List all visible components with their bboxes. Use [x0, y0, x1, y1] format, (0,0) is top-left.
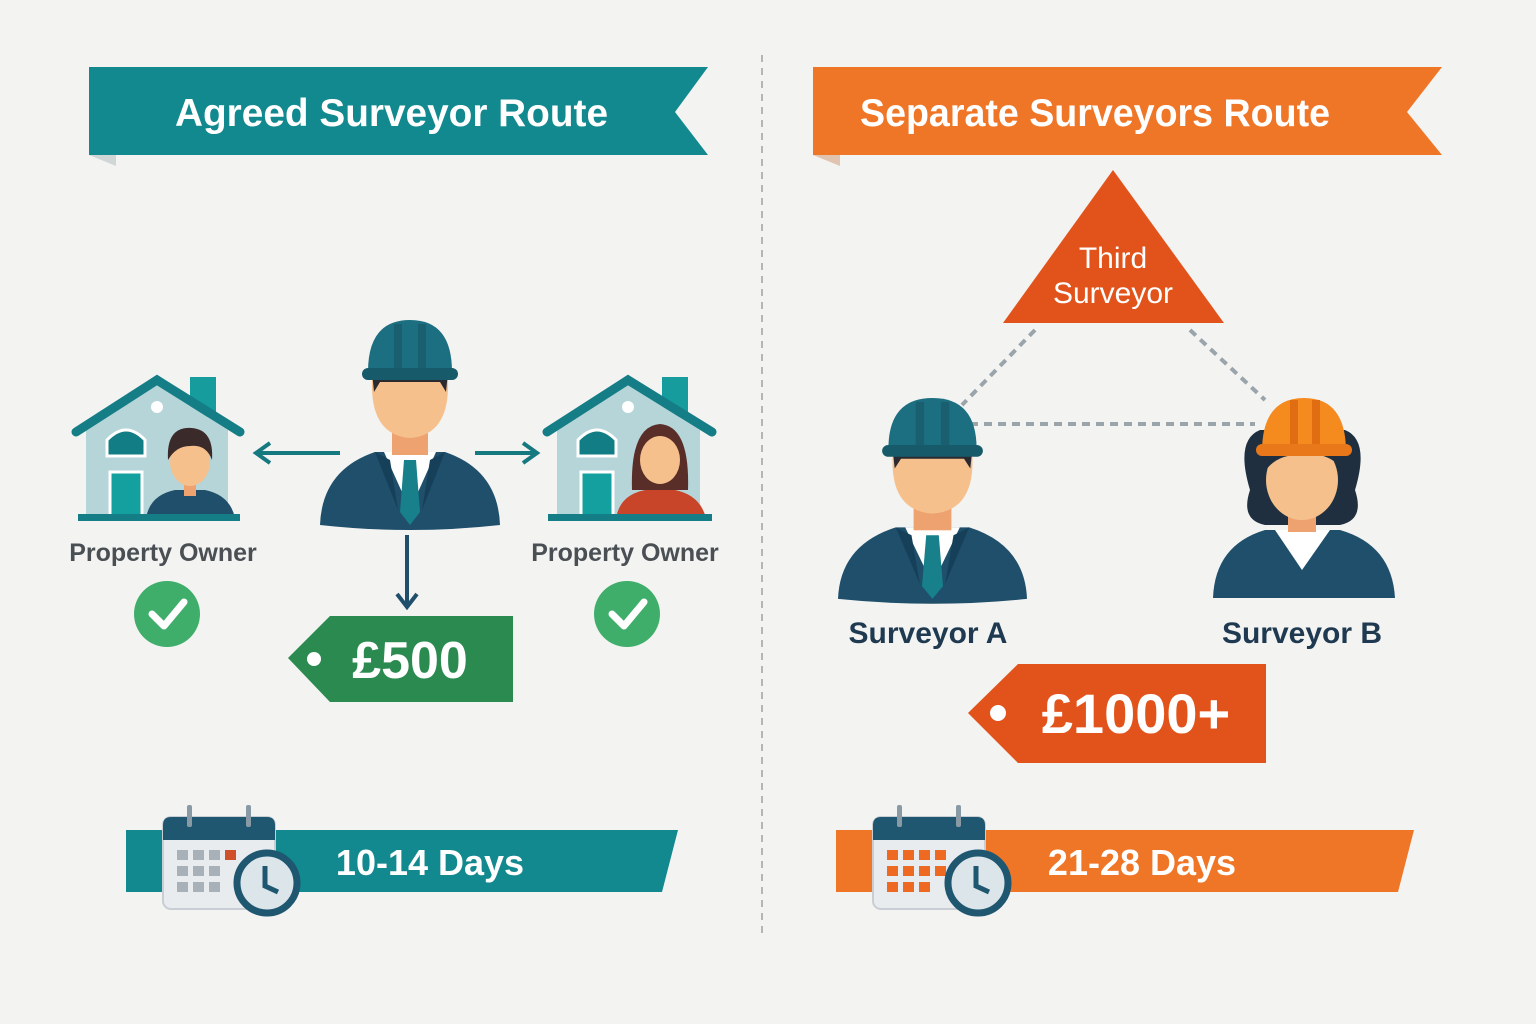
surveyor labels	[849, 617, 1382, 650]
labels property owner: Property Owner	[531, 539, 719, 567]
right timeline bar	[836, 805, 1414, 913]
price tag £1000+	[968, 664, 1266, 763]
surveyor A	[838, 398, 1027, 604]
surveyor labels: Surveyor A	[849, 617, 1007, 650]
price tag £1000+: £1000+	[1042, 682, 1230, 745]
third surveyor triangle: Third	[1079, 242, 1147, 275]
left timeline bar: 10-14 Days	[336, 842, 524, 883]
right title banner: Separate Surveyors Route	[860, 92, 1330, 135]
surveyor labels: Surveyor B	[1222, 617, 1382, 650]
left house with owner	[76, 377, 240, 521]
surveyor B	[1213, 398, 1395, 598]
price tag £500: £500	[352, 632, 468, 690]
right timeline bar: 21-28 Days	[1048, 842, 1236, 883]
left title banner	[89, 67, 708, 166]
left title banner: Agreed Surveyor Route	[175, 92, 608, 135]
third surveyor triangle: Surveyor	[1053, 277, 1173, 310]
check icons	[134, 581, 660, 647]
price tag £500	[288, 616, 513, 702]
arrows	[256, 443, 537, 607]
divider	[761, 55, 763, 935]
right title banner	[813, 67, 1442, 166]
dashed connections	[962, 330, 1265, 424]
left timeline bar	[126, 805, 678, 913]
agreed surveyor	[320, 320, 500, 530]
third surveyor triangle	[1003, 170, 1224, 323]
labels property owner: Property Owner	[69, 539, 257, 567]
labels property owner	[69, 539, 719, 567]
right house with owner	[547, 377, 712, 521]
